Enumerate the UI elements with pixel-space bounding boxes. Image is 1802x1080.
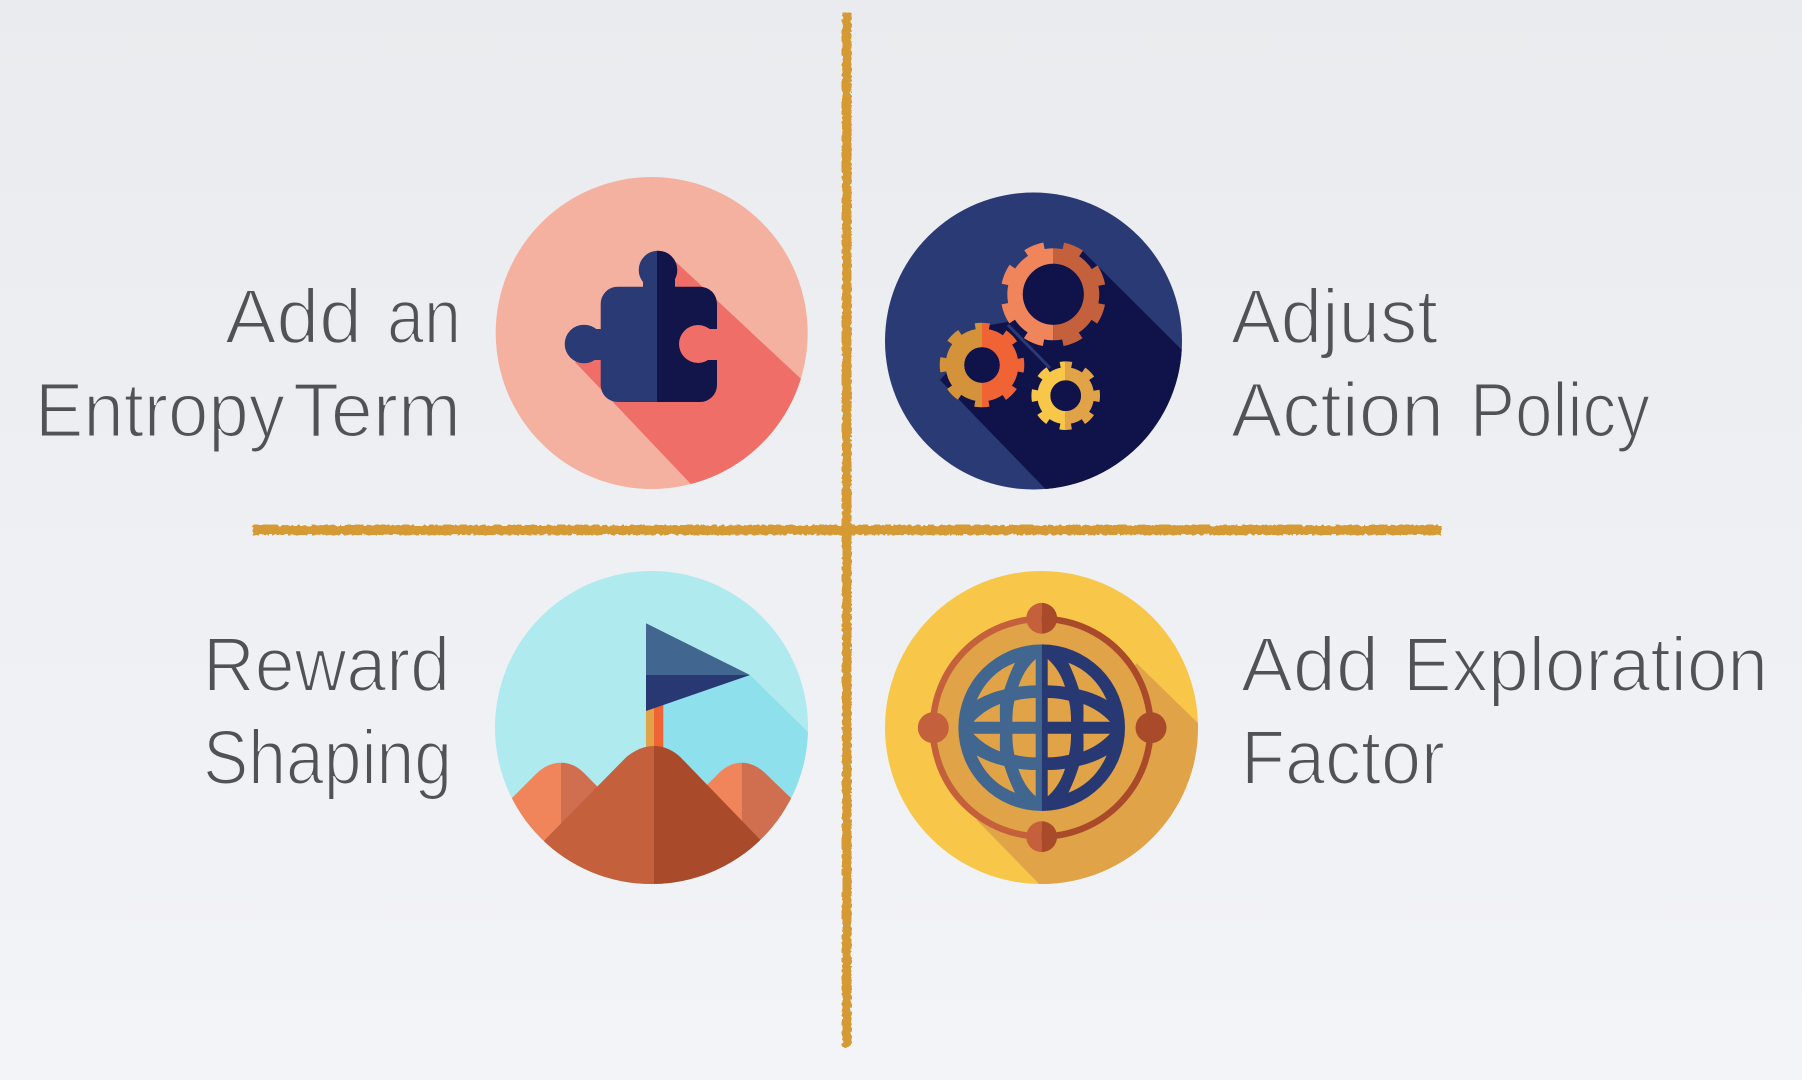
icon: gears	[885, 192, 1190, 500]
label: Add Exploration Factor: Factor	[1241, 715, 1445, 801]
label: Adjust Action Policy: Policy	[1470, 368, 1650, 454]
label: Add an Entropy Term: Entropy	[35, 368, 285, 454]
icon: globe with orbit	[885, 571, 1205, 890]
vertical divider line	[842, 13, 852, 1047]
panel: adjust action policy	[885, 192, 1650, 500]
label: Adjust Action Policy: Action	[1231, 368, 1444, 454]
label: Add an Entropy Term: Add	[225, 274, 362, 360]
label: Add Exploration Factor: Add	[1241, 622, 1379, 708]
panel: add exploration factor	[885, 571, 1768, 890]
label: Add an Entropy Term: an	[387, 274, 461, 360]
icon: flag on mountain	[495, 571, 808, 884]
label: Add an Entropy Term	[35, 274, 461, 454]
label: Reward Shaping: Reward	[203, 622, 450, 708]
label: Add Exploration Factor	[1241, 622, 1768, 801]
icon: puzzle piece	[496, 177, 808, 489]
label: Add an Entropy Term: Term	[293, 368, 461, 454]
label: Reward Shaping: Shaping	[203, 715, 452, 801]
panel: add an entropy term	[42, 177, 808, 489]
label: Adjust Action Policy	[1231, 274, 1650, 454]
horizontal divider line	[253, 525, 1442, 535]
label: Reward Shaping	[203, 622, 452, 801]
panel: reward shaping	[203, 571, 820, 900]
label: Add Exploration Factor: Exploration	[1403, 622, 1768, 708]
label: Adjust Action Policy: Adjust	[1231, 274, 1438, 360]
